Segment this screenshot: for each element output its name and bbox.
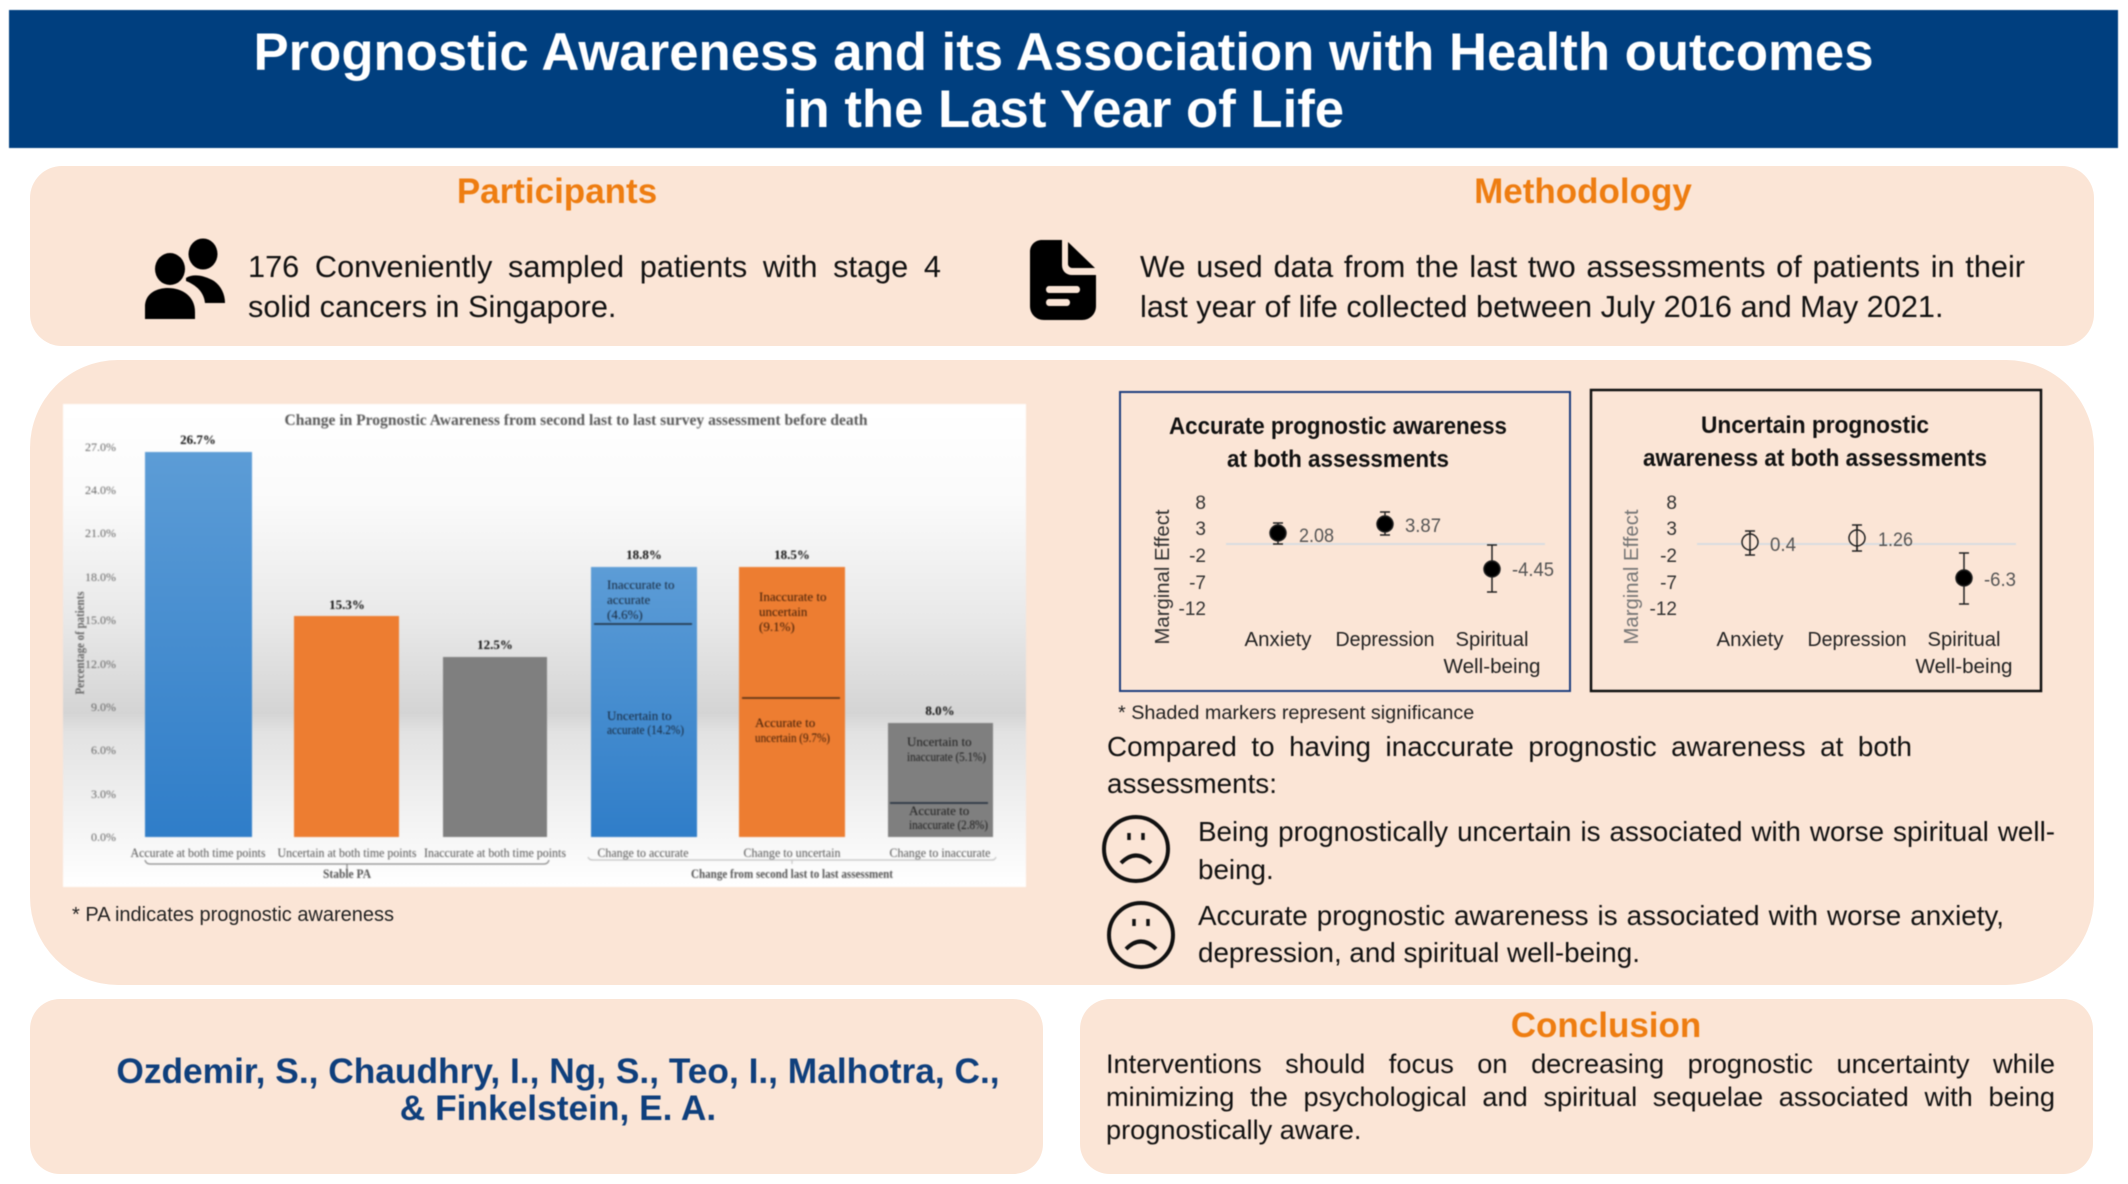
bracket: stable PA: Stable PA xyxy=(323,866,372,881)
y axis xyxy=(1650,493,1677,620)
y axis labels: 21.0% xyxy=(85,526,116,540)
icon: sad face 1 xyxy=(1101,814,1171,884)
value labels: -6.3 xyxy=(1984,570,2016,591)
bar totals xyxy=(180,432,955,718)
bracket: change from second last to last assessment: Change from second last to last assessment xyxy=(691,866,894,881)
categories xyxy=(1244,629,1540,678)
categories: Well-being xyxy=(1916,656,2012,678)
y axis: -7 xyxy=(1189,573,1206,594)
y axis labels: 3.0% xyxy=(91,787,116,801)
bar totals: 18.5% xyxy=(774,547,810,562)
value labels xyxy=(1770,530,2016,591)
value labels xyxy=(1299,516,1554,581)
icon: document xyxy=(1029,239,1097,321)
bracket: stable PA xyxy=(145,860,549,881)
y axis title: Marginal Effect xyxy=(1152,509,1174,644)
chart title: Change in Prognostic Awareness from second last to last survey assessment before death xyxy=(284,412,868,429)
bar totals: 18.8% xyxy=(626,547,662,562)
text: uncertain finding: Being prognostically uncertain is associated with worse spiritual well- xyxy=(1198,816,2055,847)
marginal effect chart: uncertain xyxy=(1588,388,2044,694)
title banner: in the Last Year of Life xyxy=(783,80,1344,139)
category labels: Change to uncertain xyxy=(744,845,841,860)
y axis labels xyxy=(85,440,116,844)
stack dividers xyxy=(594,624,988,803)
text: methodology line 2: last year of life collected between July 2016 and May 2021. xyxy=(1140,289,1943,324)
segment labels: accurate (14.2%) xyxy=(607,722,684,737)
y axis: 3 xyxy=(1666,519,1677,540)
text: participants line 2: solid cancers in Singapore. xyxy=(248,289,616,324)
y axis: -7 xyxy=(1660,573,1677,594)
y axis labels: 18.0% xyxy=(85,570,116,584)
segment labels: uncertain xyxy=(759,604,808,619)
y axis: -2 xyxy=(1189,546,1206,567)
heading: participants: Participants xyxy=(457,172,657,211)
categories: Well-being xyxy=(1444,656,1540,678)
title banner: Prognostic Awareness and its Association with Health outcomes xyxy=(253,23,1874,82)
text: compared line 1: Compared to having inaccurate prognostic awareness at both xyxy=(1107,731,1912,762)
segment labels: Uncertain to xyxy=(907,734,972,749)
panel: conclusion xyxy=(1080,999,2093,1174)
category labels xyxy=(130,845,991,860)
chart heading: Accurate prognostic awareness xyxy=(1169,413,1507,440)
bar totals: 26.7% xyxy=(180,432,216,447)
segment labels: inaccurate (2.8%) xyxy=(909,817,988,832)
chart heading xyxy=(1643,412,1987,472)
segment labels: Inaccurate to xyxy=(607,577,674,592)
y axis title: Percentage of patients xyxy=(72,592,87,694)
text: conclusion line 3: prognostically aware. xyxy=(1106,1114,1361,1145)
category labels: Inaccurate at both time points xyxy=(424,845,566,860)
bar totals: 15.3% xyxy=(329,597,365,612)
text: methodology line 1: We used data from the last two assessments of patients in their xyxy=(1140,249,2025,284)
y axis: -12 xyxy=(1650,599,1677,620)
value labels: 2.08 xyxy=(1299,526,1334,547)
panel: results xyxy=(30,360,2094,985)
text: accurate finding xyxy=(1198,900,2004,969)
y axis: 8 xyxy=(1666,493,1677,514)
y axis: 3 xyxy=(1195,519,1206,540)
bar totals: 8.0% xyxy=(925,703,955,718)
y axis labels: 9.0% xyxy=(91,700,116,714)
category labels: Change to inaccurate xyxy=(890,845,991,860)
text: participants line 1: 176 Conveniently sampled patients with stage 4 xyxy=(248,249,941,284)
categories: Spiritual xyxy=(1928,629,2000,651)
panel: participants and methodology xyxy=(30,166,2094,346)
segment labels: Accurate to xyxy=(755,715,815,730)
chart heading: Uncertain prognostic xyxy=(1701,412,1929,439)
data points xyxy=(1742,525,1972,604)
segment labels: inaccurate (5.1%) xyxy=(907,749,986,764)
category labels: Accurate at both time points xyxy=(130,845,266,860)
segment labels: (9.1%) xyxy=(759,619,795,634)
segment labels: Accurate to xyxy=(909,803,969,818)
chart heading: awareness at both assessments xyxy=(1643,445,1987,472)
categories: Anxiety xyxy=(1244,629,1312,651)
bracket: change from second last to last assessment xyxy=(588,857,996,881)
footnote: PA: * PA indicates prognostic awareness xyxy=(72,904,394,926)
y axis: -2 xyxy=(1660,546,1677,567)
y axis labels: 12.0% xyxy=(85,657,116,671)
value labels: -4.45 xyxy=(1512,560,1554,581)
citation text: Ozdemir, S., Chaudhry, I., Ng, S., Teo, I., Malhotra, C., xyxy=(116,1052,1000,1091)
data points xyxy=(1270,512,1500,592)
y axis labels: 0.0% xyxy=(91,830,116,844)
y axis labels: 15.0% xyxy=(85,613,116,627)
title banner xyxy=(9,10,2118,148)
citation text: & Finkelstein, E. A. xyxy=(400,1089,716,1128)
segment labels: Inaccurate to xyxy=(759,589,826,604)
citation text xyxy=(116,1052,1000,1128)
segment labels: accurate xyxy=(607,592,651,607)
marginal effect chart: accurate xyxy=(1118,390,1572,693)
categories: Depression xyxy=(1808,629,1906,651)
categories: Anxiety xyxy=(1716,629,1784,651)
text: accurate finding: Accurate prognostic awareness is associated with worse anxiety, xyxy=(1198,900,2004,931)
icon: sad face 2 xyxy=(1106,900,1176,970)
bars xyxy=(145,452,993,837)
stacked bar chart xyxy=(62,404,1026,888)
y axis title: Marginal Effect xyxy=(1621,509,1643,644)
categories: Depression xyxy=(1336,629,1434,651)
chart heading xyxy=(1169,413,1507,473)
value labels: 0.4 xyxy=(1770,535,1796,556)
segment labels xyxy=(607,577,988,832)
y axis labels: 27.0% xyxy=(85,440,116,454)
y axis labels: 6.0% xyxy=(91,743,116,757)
segment labels: (4.6%) xyxy=(607,607,643,622)
segment labels: uncertain (9.7%) xyxy=(755,730,830,745)
value labels: 1.26 xyxy=(1878,530,1913,551)
y axis xyxy=(1179,493,1206,620)
y axis: 8 xyxy=(1195,493,1206,514)
text: uncertain finding: being. xyxy=(1198,854,1274,885)
heading: conclusion: Conclusion xyxy=(1511,1006,1701,1045)
text: conclusion line 1: Interventions should focus on decreasing prognostic uncertainty while xyxy=(1106,1048,2055,1079)
text: accurate finding: depression, and spiritual well-being. xyxy=(1198,937,1640,968)
bar totals: 12.5% xyxy=(477,637,513,652)
category labels: Uncertain at both time points xyxy=(278,845,416,860)
text: conclusion line 2: minimizing the psychological and spiritual sequelae associated with being xyxy=(1106,1081,2055,1112)
segment labels: Uncertain to xyxy=(607,708,672,723)
chart heading: at both assessments xyxy=(1227,446,1449,473)
heading: methodology: Methodology xyxy=(1474,172,1692,211)
text: compared line 2: assessments: xyxy=(1107,768,1277,799)
category labels: Change to accurate xyxy=(598,845,689,860)
text: uncertain finding xyxy=(1198,816,2055,886)
panel: citation xyxy=(30,999,1043,1174)
categories xyxy=(1716,629,2012,678)
y axis labels: 24.0% xyxy=(85,483,116,497)
icon: people xyxy=(144,238,226,320)
categories: Spiritual xyxy=(1456,629,1528,651)
value labels: 3.87 xyxy=(1405,516,1441,537)
footnote: shaded markers: * Shaded markers represent significance xyxy=(1118,702,1474,724)
y axis: -12 xyxy=(1179,599,1206,620)
